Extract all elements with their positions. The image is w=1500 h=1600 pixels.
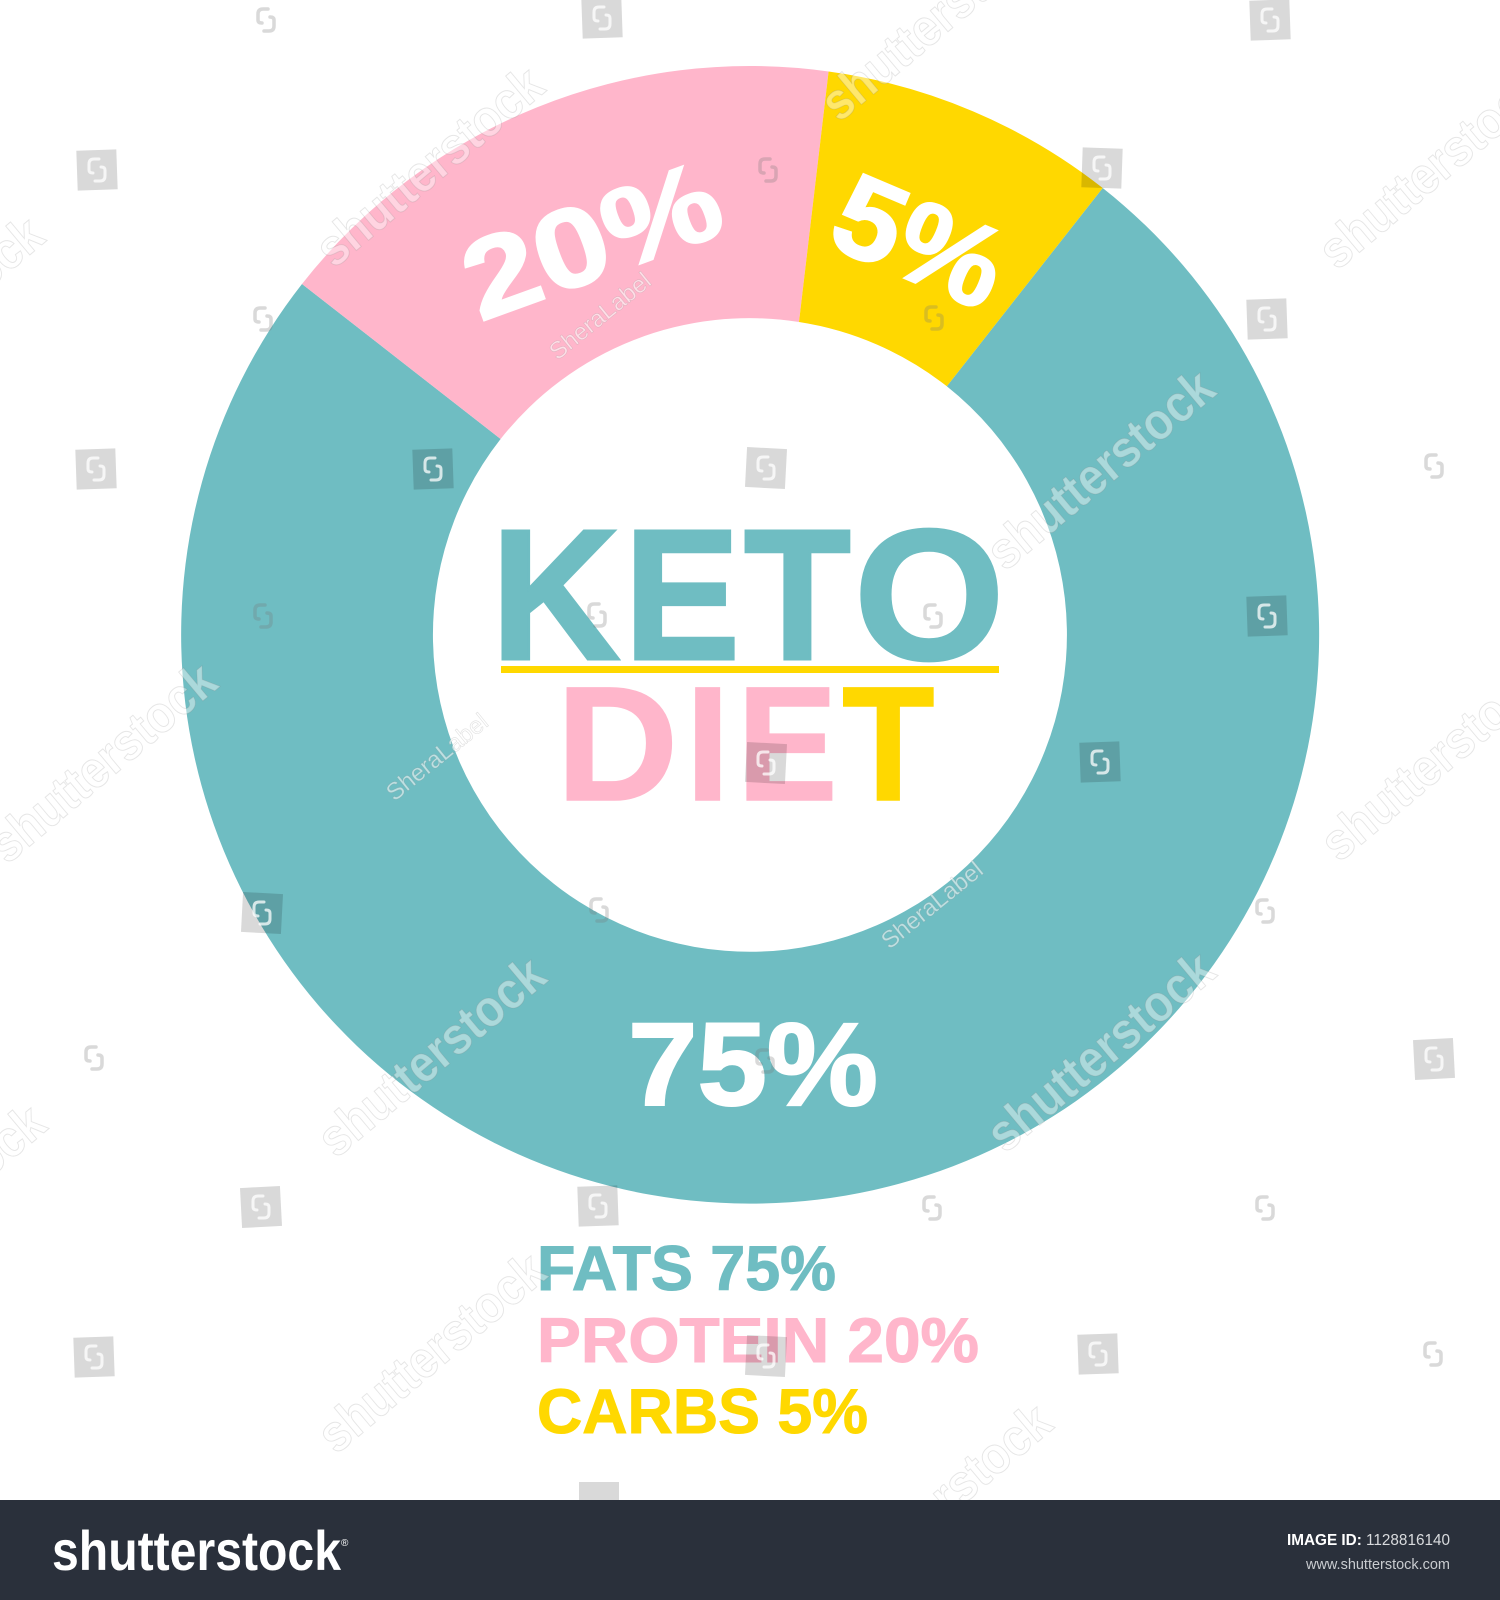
footer image id: IMAGE ID: 1128816140 — [1287, 1532, 1450, 1549]
title: KETO: E — [624, 492, 740, 699]
label: 75%: 75% — [628, 999, 878, 1131]
segment: carbs 5% — [799, 72, 1103, 386]
title: DIET: I — [685, 652, 730, 835]
watermark author text: SheraLabel — [876, 856, 989, 955]
label: 20%: 20% — [445, 136, 738, 345]
title: DIET: T — [842, 652, 934, 835]
footer registered mark: ® — [341, 1538, 349, 1549]
watermark text layer: shutterstock — [305, 55, 555, 278]
title: KETO: T — [744, 492, 850, 699]
legend: fats: FATS 75% — [537, 1234, 836, 1304]
legend: protein: PROTEIN 20% — [537, 1306, 979, 1376]
watermark small swirl marks — [86, 9, 1442, 1365]
watermark text layer: shutterstock — [976, 940, 1226, 1163]
title: KETO: K — [491, 492, 620, 699]
watermark text layer: shutterstock — [307, 945, 557, 1168]
title: DIET: E — [737, 652, 837, 835]
watermark text layer: shutterstock — [976, 358, 1226, 581]
segment: fats 75% — [181, 188, 1319, 1204]
watermark author text: SheraLabel — [381, 708, 494, 807]
label: 5%: 5% — [814, 147, 1025, 335]
footer site url: www.shutterstock.com — [1305, 1556, 1450, 1573]
legend — [537, 1234, 979, 1447]
segment: protein 20% — [302, 66, 829, 439]
footer logo: shutterstock — [52, 1519, 342, 1582]
title underline — [501, 666, 999, 673]
title: DIET — [550, 680, 950, 805]
title: KETO: O — [854, 492, 1004, 699]
title: DIET: D — [556, 652, 678, 835]
watermark square hook marks — [86, 7, 1442, 1368]
watermark author text: SheraLabel — [544, 267, 657, 366]
watermark author text — [381, 267, 989, 955]
title: KETO — [480, 515, 1010, 675]
donut chart — [181, 66, 1319, 1204]
footer bar — [0, 1500, 1500, 1600]
legend: carbs: CARBS 5% — [537, 1377, 868, 1447]
watermark text layer: shutterstock — [307, 1241, 557, 1464]
